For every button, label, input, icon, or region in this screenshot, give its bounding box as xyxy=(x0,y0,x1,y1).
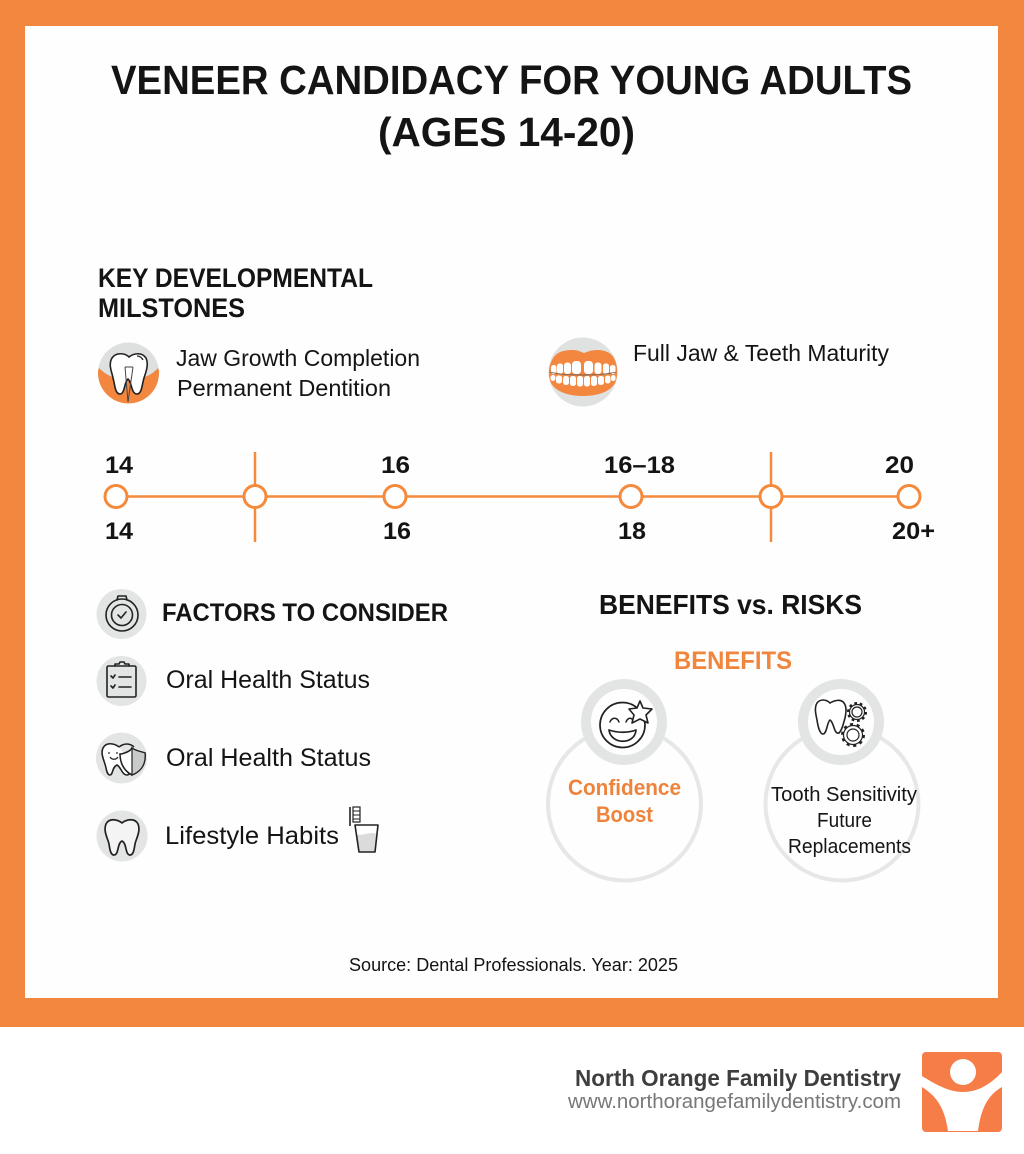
timeline xyxy=(105,452,935,545)
text: jaw growth and dentition: Jaw Growth Completion xyxy=(176,345,420,371)
card: risks xyxy=(766,684,918,880)
panel: factors to consider xyxy=(96,589,448,862)
icon: toothbrush in glass xyxy=(350,807,378,852)
text: confidence boost: Boost xyxy=(596,802,654,827)
icon: stopwatch check xyxy=(96,589,146,639)
subheading: benefits: BENEFITS xyxy=(674,647,792,675)
text: oral health status: Oral Health Status xyxy=(166,666,370,694)
icon: clipboard checklist xyxy=(96,656,146,706)
timeline: 14 xyxy=(105,518,133,545)
icon: tooth with root on orange gum xyxy=(98,342,159,404)
title: VENEER CANDIDACY FOR YOUNG ADULTS xyxy=(111,57,912,103)
text: confidence boost xyxy=(568,775,681,827)
heading: benefits vs risks: BENEFITS vs. RISKS xyxy=(599,589,862,620)
title: (AGES 14-20) xyxy=(378,109,635,155)
icon: tooth xyxy=(96,810,148,862)
icon: smiling face with star xyxy=(600,701,652,748)
footer brand text xyxy=(567,1065,901,1113)
timeline: 20 xyxy=(885,452,914,479)
timeline: 20+ xyxy=(892,518,935,545)
text: full jaw and teeth maturity: Full Jaw & Teeth Maturity xyxy=(633,340,889,366)
timeline: 16 xyxy=(383,518,411,545)
text: jaw growth and dentition xyxy=(176,345,420,401)
icon: smile with teeth xyxy=(548,338,618,406)
panel: benefits vs risks xyxy=(548,589,918,880)
text: lifestyle habits: Lifestyle Habits xyxy=(165,822,339,850)
text: jaw growth and dentition: Permanent Dentition xyxy=(177,375,391,401)
timeline: 16–18 xyxy=(604,452,675,479)
text: oral health status repeated: Oral Health Status xyxy=(166,744,371,772)
footer brand text: www.northorangefamilydentistry.com xyxy=(567,1091,901,1113)
heading: factors: FACTORS TO CONSIDER xyxy=(162,599,448,627)
card: confidence boost xyxy=(548,684,701,880)
source note: Source: Dental Professionals. Year: 2025 xyxy=(349,955,678,975)
text: confidence boost: Confidence xyxy=(568,775,681,800)
heading: key developmental milestones: MILSTONES xyxy=(98,293,245,323)
title xyxy=(111,57,912,155)
timeline: 16 xyxy=(381,452,410,479)
timeline: 14 xyxy=(105,452,133,479)
heading: key developmental milestones xyxy=(98,263,373,323)
icon: tooth with gears xyxy=(815,700,866,746)
logo xyxy=(922,1052,1002,1132)
text: tooth sensitivity, future replacements: Future xyxy=(817,810,872,832)
text: tooth sensitivity, future replacements: Tooth Sensitivity xyxy=(771,784,917,806)
timeline: 18 xyxy=(618,518,646,545)
heading: key developmental milestones: KEY DEVELOPMENTAL xyxy=(98,263,373,293)
footer brand text: North Orange Family Dentistry xyxy=(575,1065,901,1091)
icon: tooth with shield xyxy=(96,732,147,784)
text: tooth sensitivity, future replacements: Replacements xyxy=(788,836,911,858)
text: tooth sensitivity, future replacements xyxy=(771,784,917,858)
